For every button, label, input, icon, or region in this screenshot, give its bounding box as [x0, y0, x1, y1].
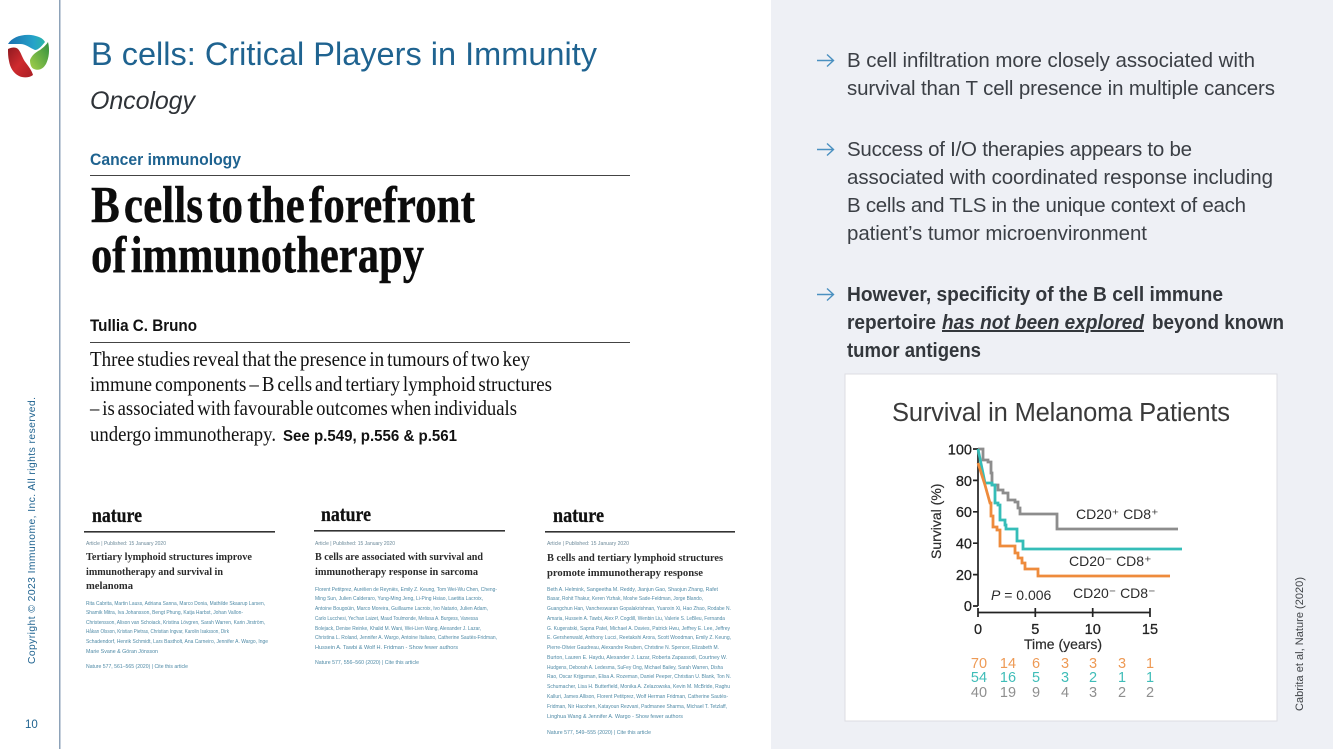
- survival line chart: 0: [974, 622, 982, 638]
- bullet 3: repertoire: [847, 312, 936, 334]
- paper card: immunotherapy response: nature: [553, 503, 604, 527]
- article section label: Cancer immunology: [90, 150, 241, 169]
- article summary: undergo immunotherapy.: [90, 422, 276, 446]
- bullet 1: B cell infiltration more closely associated with: [847, 49, 1255, 72]
- citation: Cabrita et al, Nature (2020): [1294, 577, 1306, 711]
- paper card: sarcoma: Hussein A. Tawbi & Wolf H. Fridman - Show fewer authors: [315, 645, 458, 651]
- paper card: immunotherapy response: Hudgens, Deborah A. Ledesma, SuFey Ong, Michael Bailey, Sarah Warren, Disha: [547, 665, 724, 671]
- paper card: melanoma: [84, 503, 275, 670]
- chart series labels: CD20⁻ CD8⁺: [1069, 553, 1151, 569]
- paper card: melanoma: Schadendorf, Henrik Schmidt, Lars Bastholt, Ana Carneiro, Jennifer A. Wargo, Inge: [86, 639, 268, 645]
- at-risk table: 2: [1089, 670, 1097, 686]
- bullet 3: beyond known: [1152, 312, 1284, 334]
- bullet 2: associated with coordinated response including: [847, 166, 1273, 189]
- chart series labels: CD20⁺ CD8⁺: [1076, 506, 1158, 522]
- paper card: immunotherapy response: Basar, Rohit Thakur, Keren Yizhak, Moshe Sade-Feldman, Jorge Blando,: [547, 596, 703, 602]
- paper card: sarcoma: B cells are associated with survival and: [315, 551, 483, 563]
- at-risk table: 3: [1061, 656, 1069, 672]
- at-risk table: 3: [1089, 656, 1097, 672]
- at-risk table: 40: [971, 685, 987, 701]
- paper card: sarcoma: Carlo Lucchesi, Yec'han Laizet, Maud Toulmonde, Melissa A. Burgess, Vanessa: [315, 616, 479, 622]
- at-risk table: 2: [1146, 685, 1154, 701]
- title: B cells: Critical Players in Immunity: [91, 36, 598, 72]
- paper card: immunotherapy response: Linghua Wang & Jennifer A. Wargo - Show fewer authors: [547, 714, 683, 720]
- copyright sidebar text: Copyright © 2023 Immunome, Inc. All rights reserved.: [27, 397, 38, 664]
- at-risk table: 4: [1061, 685, 1069, 701]
- chart series labels: CD20⁻ CD8⁻: [1073, 585, 1155, 601]
- bullet 3: However, specificity of the B cell immune: [847, 284, 1223, 306]
- subtitle: Oncology: [90, 87, 196, 115]
- article summary: See p.549, p.556 & p.561: [283, 428, 457, 445]
- survival line chart: 15: [1142, 622, 1158, 638]
- bullet 2: B cells and TLS in the unique context of each: [847, 194, 1246, 217]
- paper card: immunotherapy response: Guangchun Han, Vancheswaran Gopalakrishnan, Yuanxin Xi, Hao Zhao, Rodabe N.: [547, 606, 731, 612]
- paper card: sarcoma: Antoine Bougoüin, Marco Moreira, Guillaume Lacroix, Ivo Natario, Julien Adam,: [315, 606, 488, 612]
- paper card: melanoma: Håkan Olsson, Kristian Pietras, Christian Ingvar, Karolin Isaksson, Dirk: [86, 628, 229, 635]
- paper card: immunotherapy response: Pierre-Olivier Gaudreau, Alexandre Reuben, Christine N. Spencer, Elizabeth M.: [547, 645, 719, 651]
- paper card: immunotherapy response: Beth A. Helmink, Sangeetha M. Reddy, Jianjun Gao, Shaojun Zhang, Rafet: [547, 587, 718, 593]
- paper card: immunotherapy response: E. Gershenwald, Anthony Lucci, Reetakshi Arora, Scott Woodman, Emily Z. Keung,: [547, 635, 731, 641]
- right background panel: [771, 0, 1333, 749]
- survival line chart: Time (years): [1024, 636, 1102, 652]
- paper card: sarcoma: nature: [321, 502, 371, 526]
- curve: CD20- CD8-: [978, 463, 1170, 576]
- panel: survival chart card: [845, 374, 1277, 721]
- at-risk table: 19: [1000, 685, 1016, 701]
- curve: CD20- CD8+: [978, 449, 1182, 549]
- article: Nature News and Views excerpt: [89, 150, 630, 446]
- paper card: melanoma: Tertiary lymphoid structures improve: [86, 551, 252, 563]
- paper card: melanoma: immunotherapy and survival in: [86, 566, 223, 578]
- at-risk table: 14: [1000, 656, 1016, 672]
- paper card: melanoma: nature: [92, 503, 142, 527]
- paper card: melanoma: Marie Svane & Göran Jönsson: [86, 649, 158, 655]
- survival line chart: 80: [956, 474, 972, 490]
- at-risk table: 1: [1118, 670, 1126, 686]
- article author: Tullia C. Bruno: [90, 316, 197, 335]
- survival line chart: 10: [1085, 622, 1101, 638]
- survival line chart: Survival (%): [928, 484, 944, 559]
- survival line chart: 40: [956, 536, 972, 552]
- at-risk table: 3: [1089, 685, 1097, 701]
- at-risk table: 16: [1000, 670, 1016, 686]
- bullet 1: [817, 49, 1275, 100]
- article summary: immune components – B cells and tertiary lymphoid structures: [90, 372, 552, 396]
- paper card: sarcoma: immunotherapy response in sarcoma: [315, 566, 479, 578]
- paper card: melanoma: Article | Published: 15 January 2020: [86, 541, 166, 547]
- icon: company logo: [8, 35, 49, 77]
- at-risk table: 1: [1146, 670, 1154, 686]
- bullet 3: has not been explored: [942, 312, 1145, 334]
- left sidebar rule: [59, 0, 60, 749]
- paper card: sarcoma: Bolejack, Denise Reinke, Khalid M. Wani, Wei-Lien Wang, Alexander J. Lazar,: [315, 626, 481, 632]
- at-risk table: 2: [1118, 685, 1126, 701]
- paper card: immunotherapy response: [545, 503, 735, 736]
- article summary: – is associated with favourable outcomes when individuals: [89, 396, 517, 420]
- paper card: melanoma: melanoma: [86, 580, 134, 592]
- paper card: immunotherapy response: Nature 577, 549–555 (2020) | Cite this article: [547, 730, 651, 736]
- survival line chart: 0: [964, 599, 972, 615]
- paper card: immunotherapy response: Burton, Lauren E. Haydu, Alexander J. Lazar, Roberta Zapassodi, Courtney W.: [547, 655, 727, 661]
- article headline: [91, 177, 476, 284]
- bullet 2: [817, 138, 1273, 245]
- bullet 3: tumor antigens: [847, 340, 981, 362]
- article summary: Three studies reveal that the presence in tumours of two key: [90, 347, 530, 371]
- paper card: immunotherapy response: G. Kugeratski, Sapna Patel, Michael A. Davies, Patrick Hwu, Jeffrey E. Lee, Jeffrey: [547, 626, 730, 632]
- paper card: sarcoma: Ming Sun, Julien Calderaro, Yung-Ming Jeng, Li-Ping Hsiao, Laetitia Lacroix,: [315, 596, 483, 602]
- at-risk table: 3: [1118, 656, 1126, 672]
- at-risk table: 54: [971, 670, 987, 686]
- paper card: immunotherapy response: Schumacher, Lisa H. Butterfield, Monika A. Zelazowska, Kevin M. McBride, Raghu: [547, 684, 730, 690]
- paper card: sarcoma: Christina L. Roland, Jennifer A. Wargo, Antoine Italiano, Catherine Sautès-Fridman,: [315, 635, 497, 641]
- paper card: sarcoma: Florent Petitprez, Aurélien de Reyniès, Emily Z. Keung, Tom Wei-Wu Chen, Cheng-: [315, 587, 497, 593]
- article headline: B cells to the forefront: [91, 177, 476, 234]
- bullet 2: patient’s tumor microenvironment: [847, 222, 1147, 245]
- article summary: [89, 347, 552, 446]
- at-risk table: 9: [1032, 685, 1040, 701]
- paper card: melanoma: Nature 577, 561–565 (2020) | Cite this article: [86, 664, 188, 670]
- chart heading: Survival in Melanoma Patients: [892, 399, 1230, 427]
- survival line chart: 5: [1031, 622, 1039, 638]
- chart series labels: [991, 506, 1158, 603]
- paper card: sarcoma: Article | Published: 15 January 2020: [315, 541, 395, 547]
- article headline: of immunotherapy: [91, 227, 424, 284]
- paper card: immunotherapy response: Amaria, Hussein A. Tawbi, Alex P. Cogdill, Wenbin Liu, Valerie S. LeBleu, Fernanda: [547, 616, 726, 622]
- at-risk table: 1: [1146, 656, 1154, 672]
- curve: CD20+ CD8+: [978, 449, 1178, 529]
- paper card: immunotherapy response: Rao, Oscar Krijgsman, Elisa A. Rozeman, Daniel Peeper, Christian U. Blank, Ton N.: [547, 674, 731, 680]
- chart series labels: P = 0.006: [991, 587, 1052, 603]
- survival line chart: 100: [948, 442, 972, 458]
- at-risk table: 3: [1061, 670, 1069, 686]
- at-risk table: 70: [971, 656, 987, 672]
- bullet 3: [817, 284, 1284, 362]
- bullet 1: survival than T cell presence in multiple cancers: [847, 77, 1275, 100]
- paper card: sarcoma: [314, 502, 505, 666]
- paper card: immunotherapy response: Fridman, Nir Hacohen, Katayoun Rezvani, Padmanee Sharma, Michael T. Tetzlaff,: [547, 704, 727, 710]
- paper card: immunotherapy response: promote immunotherapy response: [547, 567, 703, 579]
- at-risk table: 5: [1032, 670, 1040, 686]
- paper card: immunotherapy response: Article | Published: 15 January 2020: [547, 541, 629, 547]
- survival line chart: 20: [956, 568, 972, 584]
- survival line chart: 60: [956, 505, 972, 521]
- page number: 10: [25, 719, 38, 731]
- survival line chart: [928, 442, 1182, 652]
- bullet 2: Success of I/O therapies appears to be: [847, 138, 1192, 161]
- paper card: immunotherapy response: Kalluri, James Allison, Florent Petitprez, Wolf Herman Fridman, Catherine Sautès-: [547, 694, 728, 700]
- paper card: melanoma: Shamik Mitra, Iva Johansson, Bengt Phung, Katja Harbst, Johan Vallon-: [86, 610, 243, 616]
- at-risk table: [971, 656, 1154, 701]
- paper card: immunotherapy response: B cells and tertiary lymphoid structures: [547, 552, 723, 564]
- paper card: melanoma: Christensson, Alison van Schoiack, Kristina Lövgren, Sarah Warren, Karin Jirström,: [86, 620, 265, 626]
- paper card: melanoma: Rita Cabrita, Martin Lauss, Adriana Sanna, Marco Donia, Mathilde Skaarup Larsen,: [86, 601, 265, 607]
- paper card: sarcoma: Nature 577, 556–560 (2020) | Cite this article: [315, 660, 419, 666]
- at-risk table: 6: [1032, 656, 1040, 672]
